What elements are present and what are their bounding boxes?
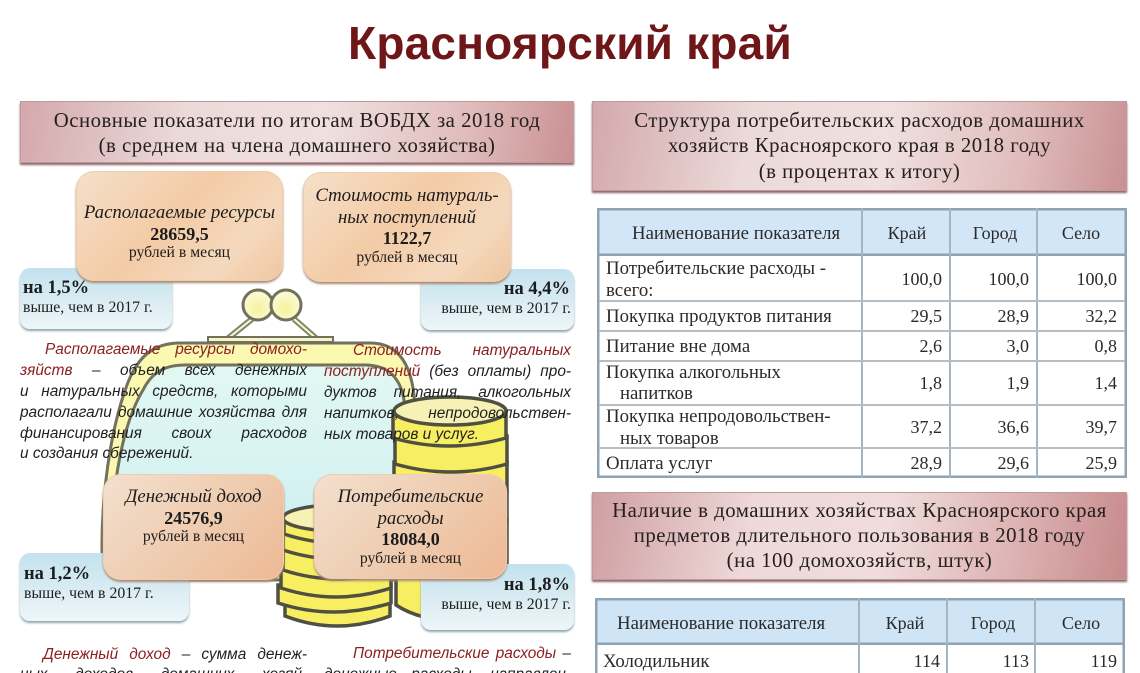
table: consumer spending structure xyxy=(597,208,1127,478)
title: Красноярский край xyxy=(348,17,792,69)
text: disposable resources definition: зяйств – объем всех денежных xyxy=(20,362,307,379)
card: disposable resources growth: выше, чем в 2017 г. xyxy=(23,299,153,316)
coins: upper stack xyxy=(393,397,507,617)
card: consumer spending: 18084,0 xyxy=(381,529,440,549)
table: consumer spending structure: 39,7 xyxy=(1086,417,1117,437)
table: durable goods xyxy=(595,598,1125,673)
table: durable goods: 119 xyxy=(1091,651,1117,671)
table: consumer spending structure: 0,8 xyxy=(1094,336,1117,356)
table: consumer spending structure: всего: xyxy=(606,280,654,301)
card: in-kind receipts: Стоимость натураль- xyxy=(315,185,499,206)
card: money income: Денежный доход xyxy=(125,486,262,507)
card: disposable resources: рублей в месяц xyxy=(129,244,230,261)
text: disposable resources definition xyxy=(20,341,308,462)
card: in-kind receipts growth xyxy=(421,269,574,330)
card: in-kind receipts: рублей в месяц xyxy=(356,249,458,266)
card: disposable resources xyxy=(76,171,283,281)
table: consumer spending structure: ных товаров xyxy=(620,428,719,449)
card: in-kind receipts: ных поступлений xyxy=(338,207,476,228)
panel heading: durable goods: (на 100 домохозяйств, штук) xyxy=(727,549,992,572)
table: consumer spending structure: 32,2 xyxy=(1086,306,1117,326)
table: consumer spending structure: Наименование показателя xyxy=(632,223,840,244)
coins: lower stack xyxy=(278,505,393,626)
table: consumer spending structure: 25,9 xyxy=(1086,453,1117,473)
card: money income growth: выше, чем в 2017 г. xyxy=(24,585,154,602)
table: consumer spending structure: 100,0 xyxy=(1076,269,1117,289)
text: money income definition: Денежный доход – сумма денеж- xyxy=(43,646,307,663)
table: consumer spending structure: Покупка продуктов питания xyxy=(606,306,832,327)
text: disposable resources definition: и натуральных средств, которыми xyxy=(20,383,307,400)
text: in-kind receipts definition xyxy=(324,342,572,443)
table: consumer spending structure: 28,9 xyxy=(998,306,1029,326)
text: in-kind receipts definition: дуктов питания, алкогольных xyxy=(324,384,571,401)
table: consumer spending structure: 1,9 xyxy=(1006,373,1029,393)
table: consumer spending structure: 36,6 xyxy=(998,417,1029,437)
card: money income xyxy=(103,474,284,580)
text: disposable resources definition: и создания сбережений. xyxy=(20,445,193,462)
table: consumer spending structure: 28,9 xyxy=(910,453,942,473)
card: consumer spending growth: выше, чем в 2017 г. xyxy=(441,596,571,613)
table: consumer spending structure: 29,5 xyxy=(910,306,942,326)
panel heading: consumer spending structure: Структура потребительских расходов домашних xyxy=(634,109,1085,132)
table: consumer spending structure: Край xyxy=(888,223,926,243)
card: in-kind receipts growth: выше, чем в 2017 г. xyxy=(441,300,571,317)
panel heading: durable goods xyxy=(592,492,1127,580)
table: consumer spending structure: Питание вне дома xyxy=(606,336,750,357)
text: disposable resources definition: Располагаемые ресурсы домохо- xyxy=(45,341,307,358)
card: in-kind receipts: 1122,7 xyxy=(383,228,431,248)
card: money income: 24576,9 xyxy=(164,508,223,528)
panel heading: main indicators: Основные показатели по итогам ВОБДХ за 2018 год xyxy=(54,109,540,132)
table: consumer spending structure: Село xyxy=(1062,223,1100,243)
table: durable goods: 113 xyxy=(1003,651,1029,671)
table: consumer spending structure: 100,0 xyxy=(902,269,942,289)
card: money income growth xyxy=(20,553,189,621)
card: disposable resources growth xyxy=(20,268,172,329)
card: consumer spending: рублей в месяц xyxy=(360,550,461,567)
table: consumer spending structure: 1,4 xyxy=(1094,373,1117,393)
table: consumer spending structure: 100,0 xyxy=(988,269,1029,289)
table: durable goods: Наименование показателя xyxy=(617,613,825,634)
card: consumer spending xyxy=(314,474,507,579)
text: consumer spending definition: Потребительские расходы – xyxy=(353,645,571,662)
panel heading: consumer spending structure: (в процентах к итогу) xyxy=(759,160,960,183)
card: disposable resources: Располагаемые ресурсы xyxy=(84,202,275,223)
table: consumer spending structure: Покупка алкогольных xyxy=(606,362,781,383)
panel heading: main indicators: (в среднем на члена домашнего хозяйства) xyxy=(99,134,495,157)
panel heading: durable goods: Наличие в домашних хозяйствах Красноярского края xyxy=(612,499,1107,522)
panel heading: durable goods: предметов длительного пользования в 2018 году xyxy=(634,524,1085,547)
card: consumer spending growth xyxy=(421,564,574,630)
panel heading: consumer spending structure: хозяйств Красноярского края в 2018 году xyxy=(668,134,1051,157)
table: consumer spending structure: 37,2 xyxy=(910,417,942,437)
table: durable goods: Холодильник xyxy=(603,651,710,672)
table: durable goods: Село xyxy=(1062,613,1100,633)
table: consumer spending structure: 2,6 xyxy=(920,336,942,356)
table: consumer spending structure: Город xyxy=(973,223,1017,243)
table: durable goods: Край xyxy=(886,613,924,633)
text: disposable resources definition: финансирования своих расходов xyxy=(20,425,307,442)
panel heading: consumer spending structure xyxy=(592,101,1127,191)
table: consumer spending structure: напитков xyxy=(620,383,693,404)
card: in-kind receipts xyxy=(303,172,511,282)
table: consumer spending structure: 29,6 xyxy=(998,453,1029,473)
text: in-kind receipts definition: напитков, непродовольствен- xyxy=(324,405,571,422)
card: consumer spending: Потребительские xyxy=(338,486,483,507)
card: disposable resources: 28659,5 xyxy=(150,224,209,244)
card: money income growth: на 1,2% xyxy=(24,564,90,584)
text: disposable resources definition: располагали домашние хозяйства для xyxy=(20,404,307,421)
card: in-kind receipts growth: на 4,4% xyxy=(504,279,570,299)
table: consumer spending structure: Покупка непродовольствен- xyxy=(606,406,831,427)
table: consumer spending structure: 1,8 xyxy=(920,373,942,393)
text: consumer spending definition xyxy=(324,645,571,673)
table: consumer spending structure: Оплата услуг xyxy=(606,453,712,474)
text: in-kind receipts definition: Стоимость натуральных xyxy=(353,342,571,359)
card: consumer spending growth: на 1,8% xyxy=(504,575,570,595)
card: disposable resources growth: на 1,5% xyxy=(23,278,89,298)
text: money income definition xyxy=(20,646,307,673)
table: durable goods: 114 xyxy=(914,651,940,671)
card: consumer spending: расходы xyxy=(377,508,444,529)
card: money income: рублей в месяц xyxy=(143,528,244,545)
table: durable goods: Город xyxy=(971,613,1015,633)
text: in-kind receipts definition: поступлений (без оплаты) про- xyxy=(324,363,571,380)
panel heading: main indicators xyxy=(20,101,574,163)
table: consumer spending structure: Потребительские расходы - xyxy=(606,258,826,279)
table: consumer spending structure: 3,0 xyxy=(1006,336,1029,356)
text: in-kind receipts definition: ных товаров и услуг. xyxy=(324,426,479,443)
